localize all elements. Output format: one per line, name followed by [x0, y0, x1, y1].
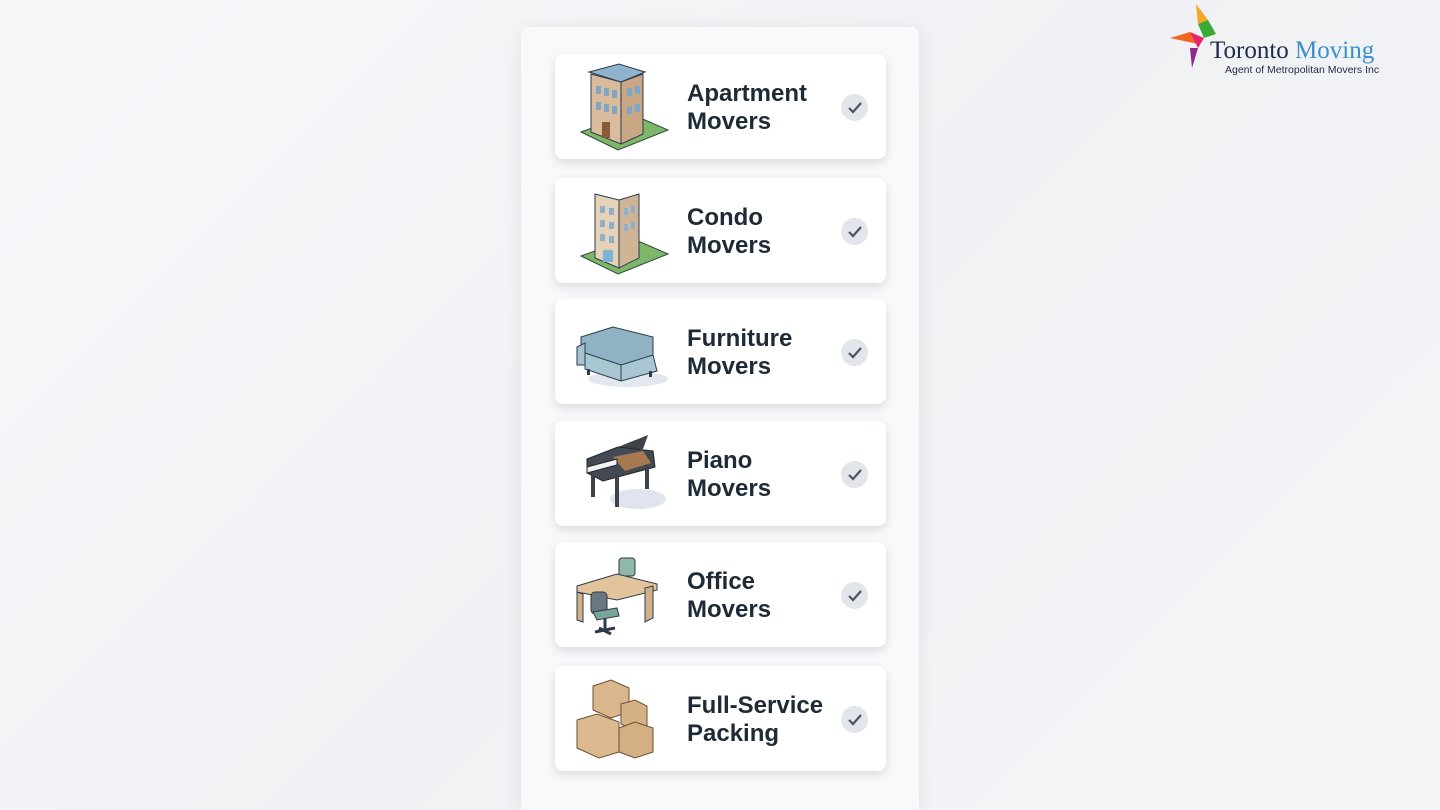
icon: check — [841, 339, 868, 366]
card: full-service packing: Packing — [687, 720, 779, 747]
card: piano movers: Movers — [687, 475, 771, 502]
icon: check — [841, 218, 868, 245]
icon: check — [841, 94, 868, 121]
icon: check — [841, 461, 868, 488]
card: condo movers: Condo — [687, 204, 763, 231]
panel: services list — [521, 27, 919, 810]
card: piano movers: Piano — [687, 447, 752, 474]
card: office movers — [555, 542, 886, 647]
card: furniture movers: Furniture — [687, 325, 792, 352]
icon: check — [841, 706, 868, 733]
icon: check — [841, 582, 868, 609]
logo: Toronto Moving — [1210, 37, 1375, 64]
card: apartment movers: Movers — [687, 108, 771, 135]
card: condo movers: Movers — [687, 232, 771, 259]
card: apartment movers — [555, 54, 886, 159]
card: full-service packing — [555, 666, 886, 771]
card: furniture movers — [555, 299, 886, 404]
logo — [1170, 4, 1379, 76]
card: office movers: Office — [687, 568, 755, 595]
card: full-service packing: Full-Service — [687, 692, 823, 719]
card: furniture movers: Movers — [687, 353, 771, 380]
card: condo movers — [555, 178, 886, 283]
card: office movers: Movers — [687, 596, 771, 623]
card: apartment movers: Apartment — [687, 80, 807, 107]
logo: Agent of Metropolitan Movers Inc — [1225, 64, 1379, 76]
card: piano movers — [555, 421, 886, 526]
